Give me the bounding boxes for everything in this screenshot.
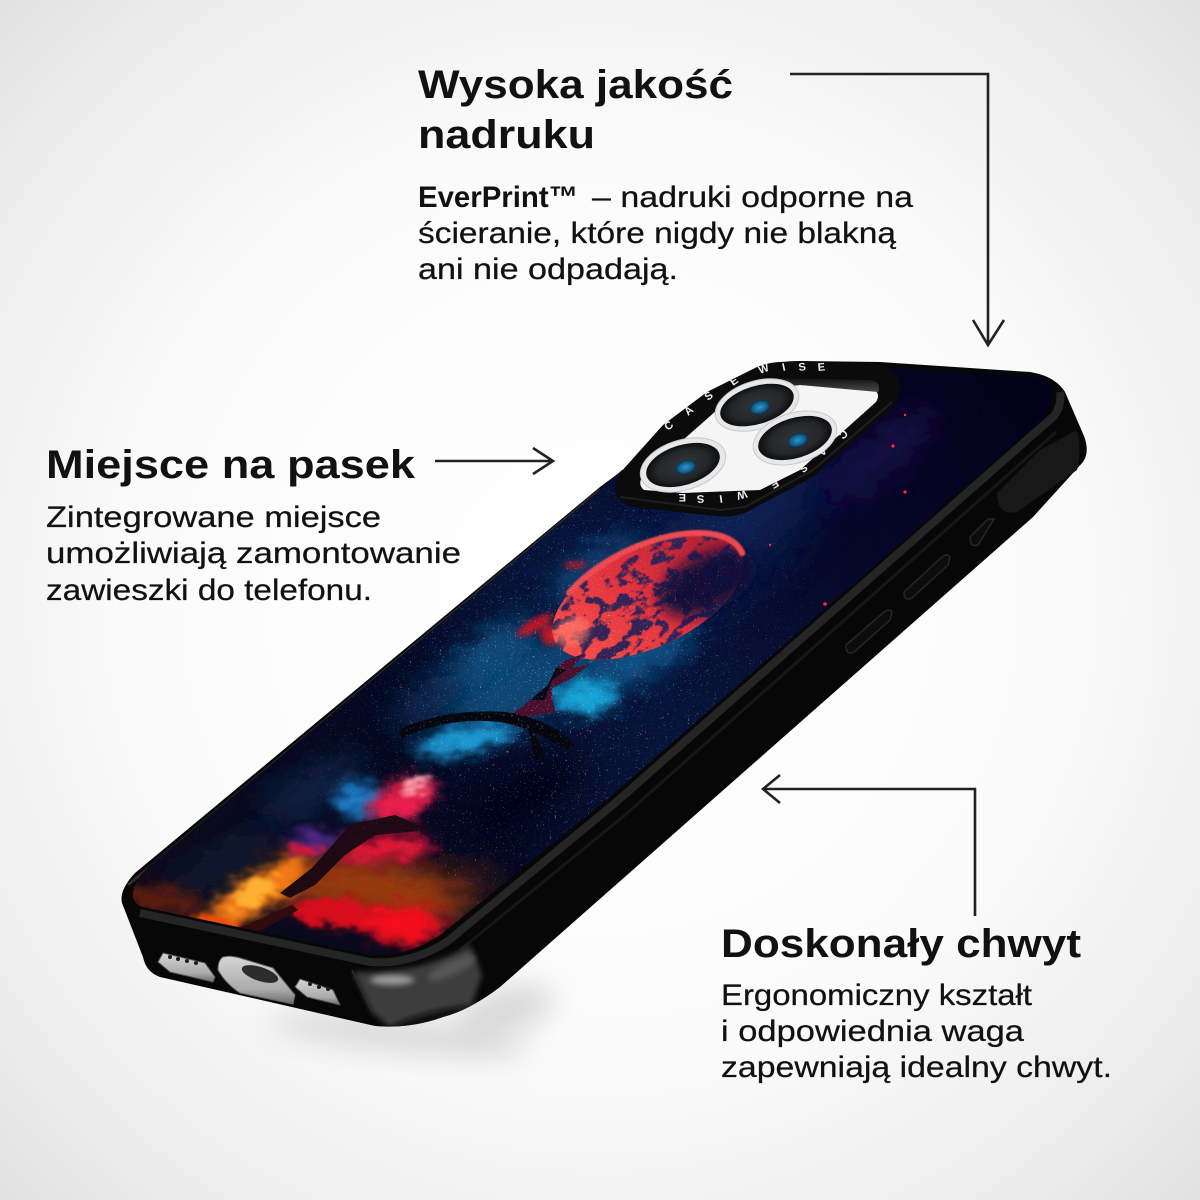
body text: EverPrint™	[418, 181, 578, 214]
reflected moon	[334, 770, 441, 834]
camera ring	[615, 362, 900, 517]
body text	[46, 501, 461, 607]
side rim highlight	[140, 392, 1060, 962]
lens top	[709, 369, 805, 441]
arrow: to side grip	[763, 775, 975, 916]
heading: Doskonały chwyt	[721, 922, 1081, 966]
arrow: to strap slot	[435, 448, 553, 474]
lens right	[747, 402, 843, 474]
ring lettering: CASEWISE	[662, 361, 826, 433]
stars	[135, 371, 1049, 951]
speaker left	[158, 953, 215, 982]
callout: strap slot	[46, 443, 461, 607]
ring lettering: CASEWISE	[679, 427, 850, 504]
speaker right	[295, 979, 340, 1005]
body text: Ergonomiczny kształt	[721, 979, 1033, 1012]
body text: i odpowiednia waga	[721, 1015, 1024, 1048]
heading: nadruku	[418, 113, 595, 157]
callout: grip	[721, 922, 1112, 1084]
ring bevel	[620, 402, 892, 510]
usb port	[218, 956, 295, 1004]
body text: Zintegrowane miejsce	[46, 501, 381, 534]
phone shadow	[269, 976, 559, 1065]
left edge highlight	[128, 490, 600, 885]
body text: ani nie odpadają.	[418, 253, 678, 286]
body text	[418, 181, 913, 286]
body text: zawieszki do telefonu.	[46, 574, 372, 607]
camera window	[640, 385, 878, 493]
figure and bridge silhouettes	[240, 654, 590, 933]
glossy bottom corner	[352, 945, 482, 1034]
strap slot	[997, 430, 1080, 513]
window top shade	[760, 378, 879, 392]
camera bump	[615, 361, 900, 517]
callout: print quality	[418, 63, 913, 286]
red spatter by moon	[515, 562, 587, 645]
moon rim	[564, 528, 746, 597]
speaker holes	[168, 955, 330, 991]
moon shadow side	[648, 540, 758, 628]
volume up	[904, 555, 950, 599]
heading: Wysoka jakość	[418, 63, 733, 107]
body text: – nadruki odporne na	[592, 181, 913, 214]
side buttons	[846, 519, 994, 653]
dark forest patch	[472, 748, 582, 838]
heading: Miejsce na pasek	[46, 443, 416, 487]
moon	[552, 528, 758, 660]
lower fire	[113, 830, 500, 945]
body text: zapewniają idealny chwyt.	[721, 1051, 1112, 1084]
arrow: to print	[790, 74, 1004, 345]
body text: ścieranie, które nigdy nie blakną	[418, 217, 896, 250]
side groove	[460, 432, 1056, 950]
case body	[122, 361, 1087, 1027]
lens left	[634, 428, 732, 502]
action button	[970, 519, 994, 546]
body text: umożliwiają zamontowanie	[46, 537, 461, 570]
heading	[418, 63, 733, 157]
printed screen artwork	[133, 362, 1053, 955]
phone case	[100, 340, 1100, 1034]
nebula glows	[151, 393, 948, 914]
body text	[721, 979, 1112, 1084]
volume down	[846, 610, 892, 653]
ring lettering	[662, 361, 850, 504]
